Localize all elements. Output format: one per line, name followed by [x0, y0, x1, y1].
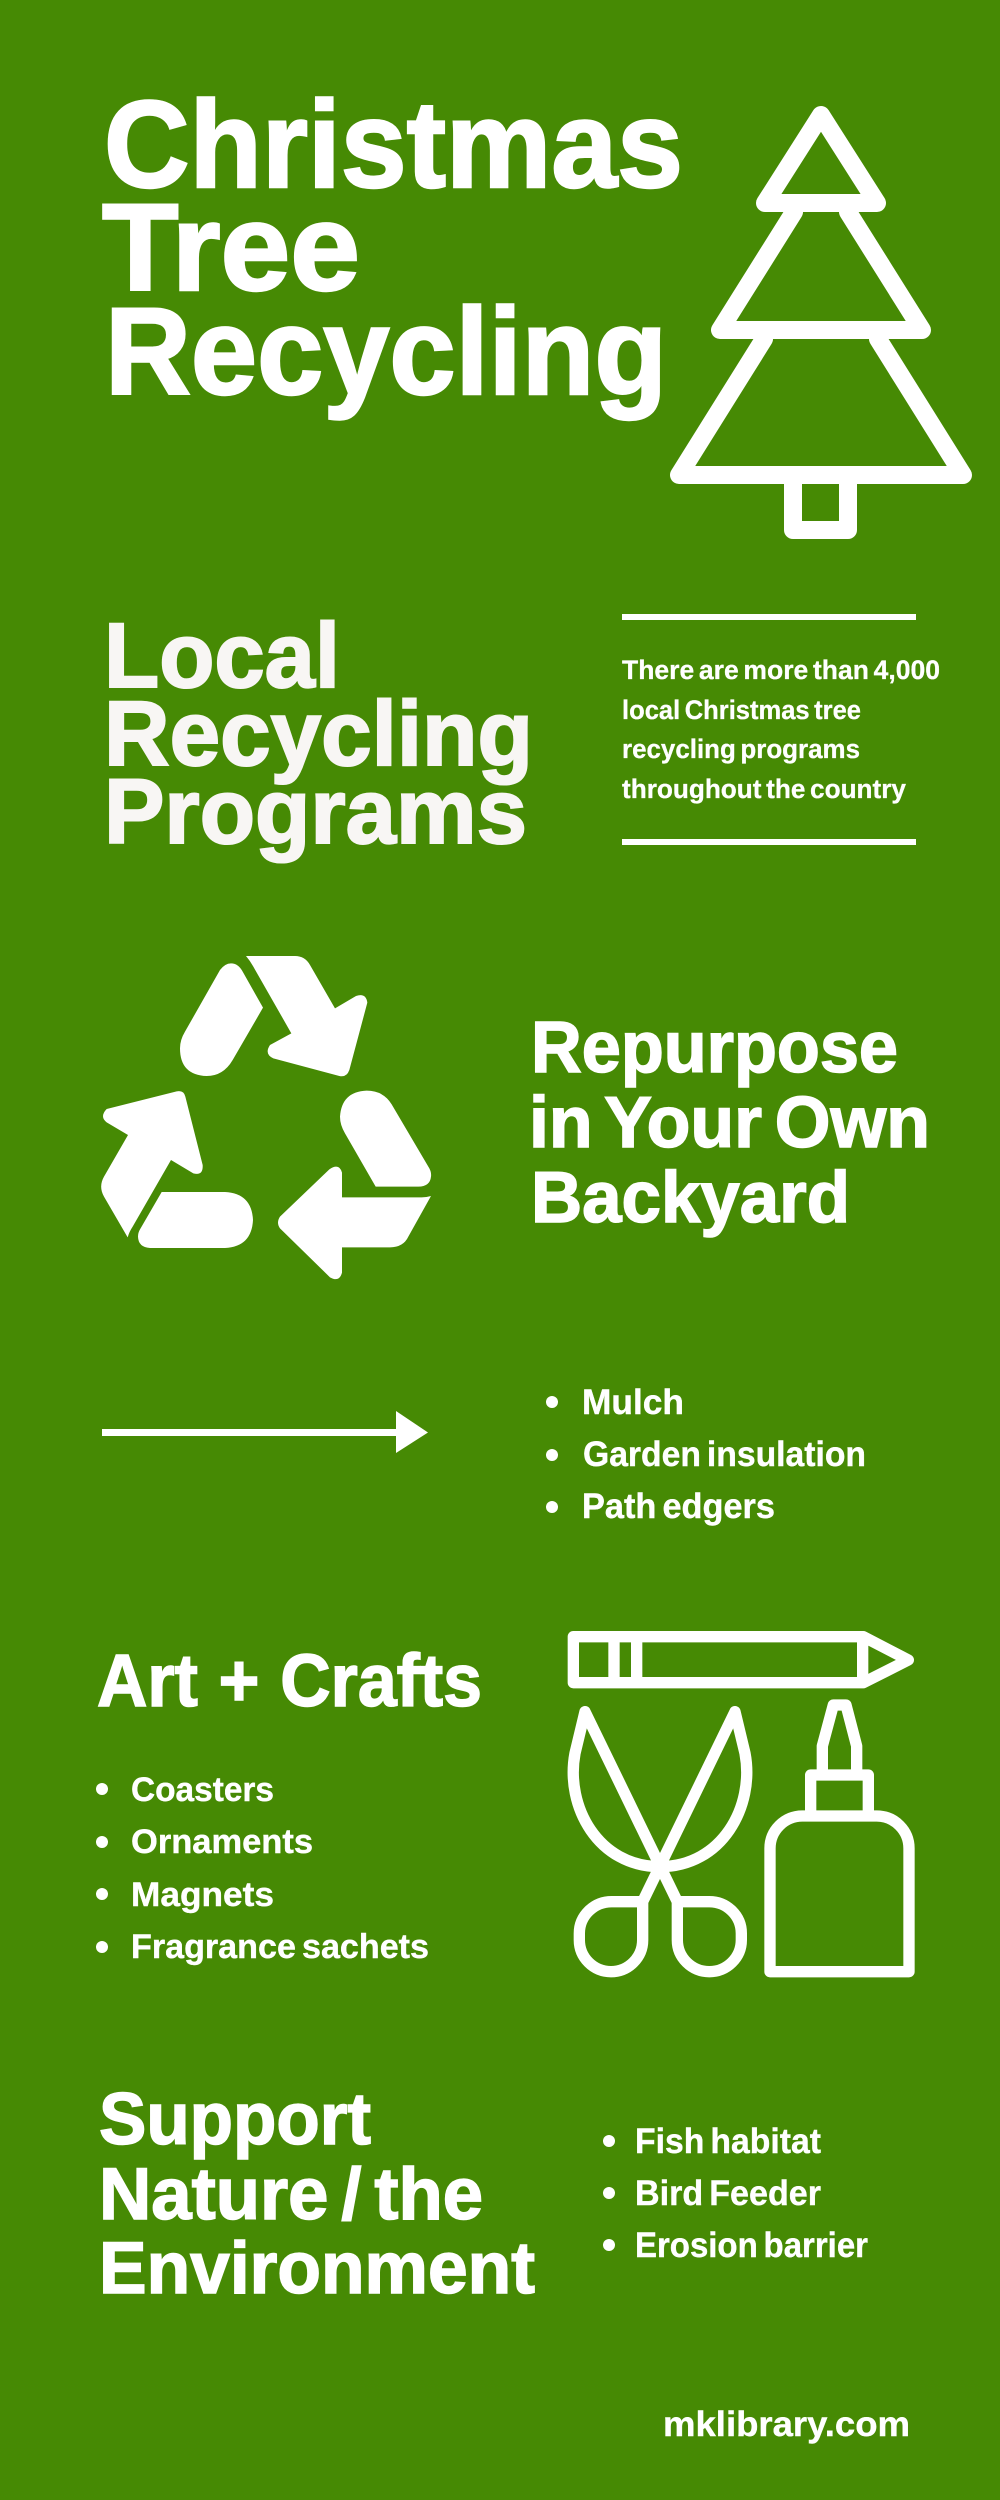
list: art and crafts items [96, 1771, 429, 1966]
heading: repurpose in your own backyard: Backyard [531, 1158, 850, 1238]
icon: scissors [573, 1712, 747, 1972]
icon: pencil [573, 1637, 908, 1683]
heading: support nature and the environment: Nature / the [99, 2154, 483, 2235]
heading: support nature and the environment: Environment [99, 2228, 535, 2309]
icon: recycling symbol [101, 956, 431, 1279]
list item: fragrance sachets: Fragrance sachets [131, 1928, 429, 1966]
heading: repurpose in your own backyard [529, 1008, 930, 1238]
arrow [102, 1411, 428, 1453]
list item: ornaments: Ornaments [131, 1823, 313, 1861]
list: backyard uses [546, 1383, 866, 1526]
text block: local programs fact: throughout the country [622, 774, 906, 804]
heading: local recycling programs: Programs [104, 761, 527, 863]
text block: local programs fact: recycling programs [622, 734, 860, 764]
title: Tree [102, 180, 360, 317]
heading: support nature and the environment [99, 2079, 535, 2309]
list: nature uses [603, 2122, 868, 2265]
title [102, 77, 683, 421]
icon: craft supplies [573, 1637, 909, 1972]
heading: local recycling programs [104, 605, 533, 863]
title: Recycling [105, 284, 667, 421]
heading: repurpose in your own backyard: Repurpose [531, 1008, 898, 1088]
heading: repurpose in your own backyard: in Your Own [529, 1083, 930, 1163]
list item: path edgers: Path edgers [582, 1487, 775, 1526]
heading: art and crafts: Art + Crafts [97, 1639, 482, 1722]
list item: bird feeder: Bird Feeder [635, 2174, 821, 2213]
list item: fish habitat: Fish habitat [635, 2122, 821, 2161]
icon: glue bottle [770, 1705, 909, 1972]
list item: erosion barrier: Erosion barrier [635, 2226, 868, 2265]
heading: support nature and the environment: Support [99, 2079, 371, 2160]
icon: christmas tree [679, 115, 963, 530]
list item: mulch: Mulch [582, 1383, 684, 1422]
heading: local recycling programs: Recycling [104, 683, 533, 785]
text block: local programs fact: There are more than 4,000 [622, 655, 940, 685]
footer: website: mklibrary.com [663, 2405, 910, 2444]
heading: local recycling programs: Local [104, 605, 340, 707]
list item: magnets: Magnets [131, 1876, 274, 1914]
text block: local programs fact: local Christmas tree [622, 695, 861, 725]
list item: garden insulation: Garden insulation [583, 1435, 866, 1474]
text block: local programs fact [622, 614, 940, 845]
list item: coasters: Coasters [131, 1771, 274, 1809]
title: Christmas [104, 77, 683, 214]
